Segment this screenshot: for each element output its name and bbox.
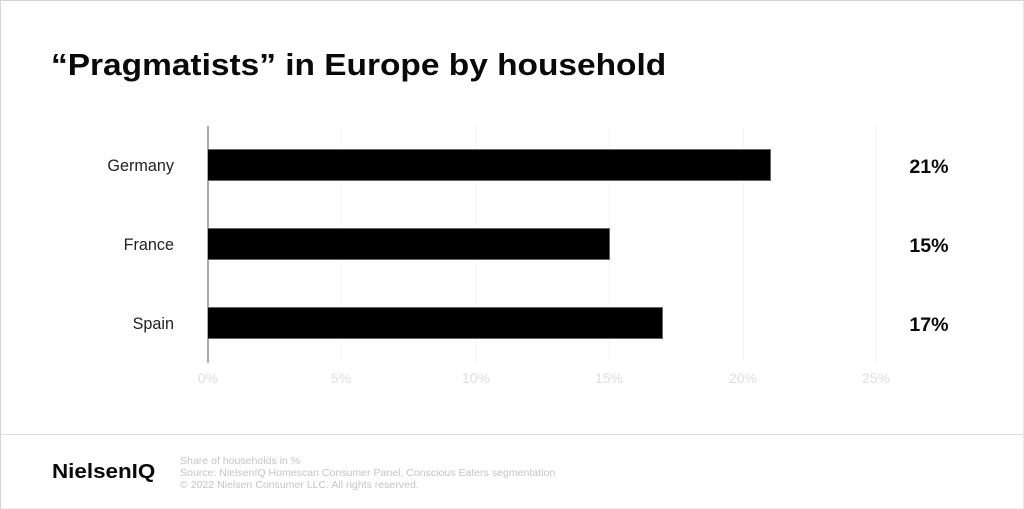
x axis labels: 25% [862,370,890,386]
x axis labels: 10% [462,370,490,386]
x axis labels [198,370,890,386]
row: France: France [124,236,174,254]
row: Germany: Germany [107,157,174,175]
row: Spain: 17% [909,314,949,336]
row: Germany [107,149,949,181]
x axis labels: 0% [198,370,218,386]
footnote text [180,455,555,491]
footnote text: Share of households in % [180,455,300,467]
footer divider [1,434,1023,435]
bar chart [107,126,949,386]
row: Spain: Spain [133,315,174,333]
title: “Pragmatists” in Europe by household [51,47,666,82]
footnote text: © 2022 Nielsen Consumer LLC. All rights reserved. [180,479,419,491]
row: Germany: 21% [909,156,949,178]
row: Spain [133,307,949,339]
row: France: 15% [909,235,949,257]
axis line [207,126,209,363]
logo: NielsenIQ: NielsenIQ [52,461,155,483]
x axis labels: 5% [331,370,351,386]
footnote text: Source: NielsenIQ Homescan Consumer Panel, Conscious Eaters segmentation [180,467,555,479]
x axis labels: 15% [595,370,623,386]
x axis labels: 20% [729,370,757,386]
row: France [124,228,949,260]
